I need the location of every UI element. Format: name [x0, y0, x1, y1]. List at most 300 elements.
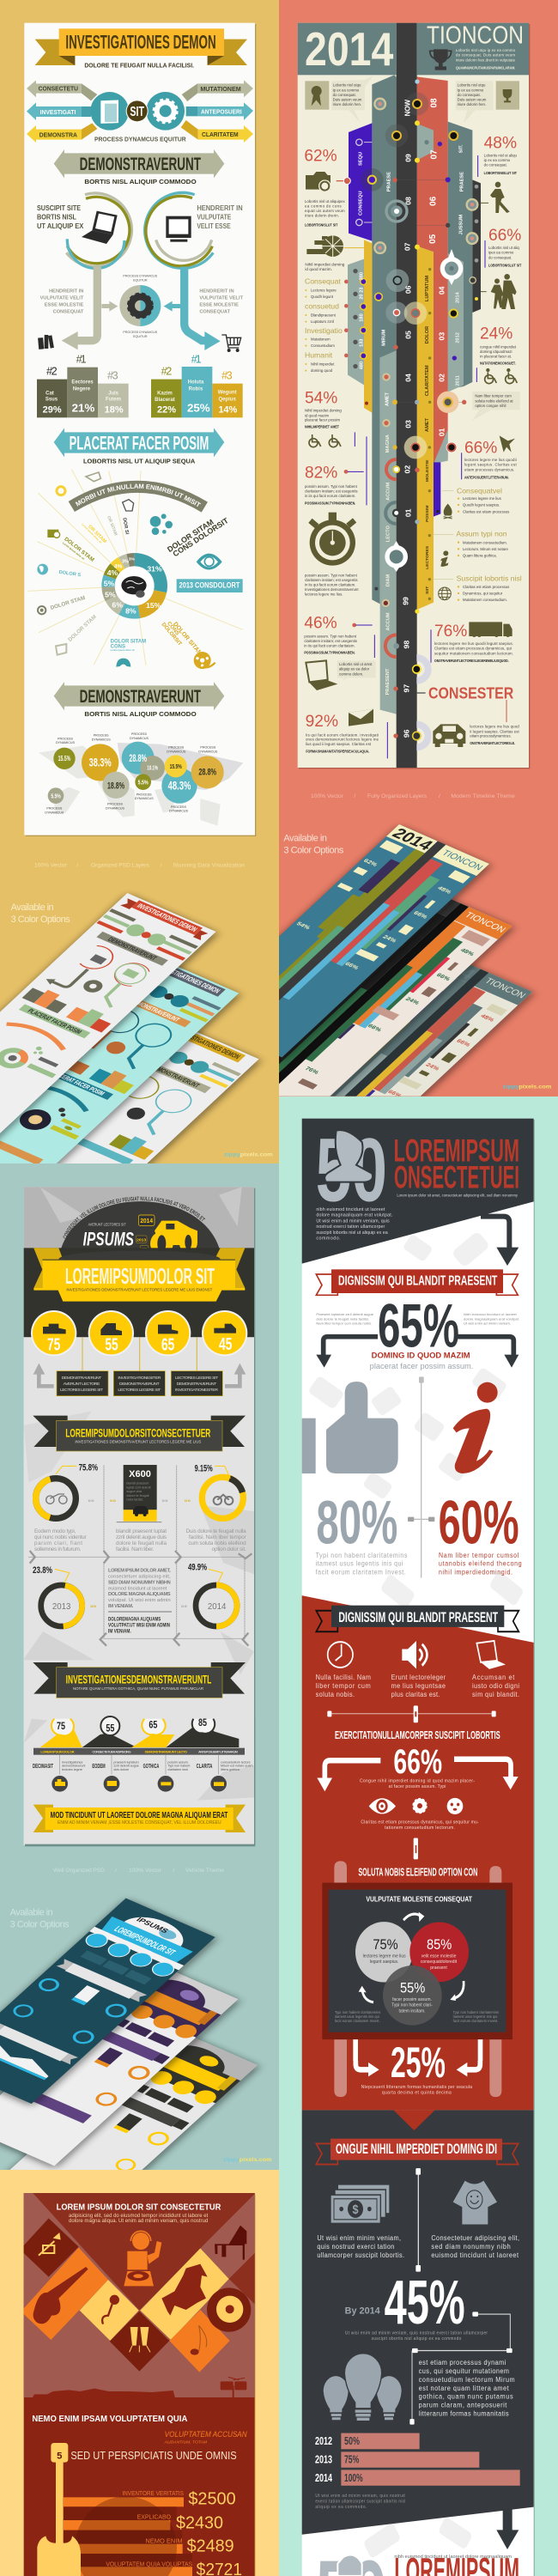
- text: voluptatem accusan: AUDANTIUM, TOTAM: [164, 2439, 208, 2445]
- arrow group: right labels: CLARITATEM: [202, 131, 239, 138]
- text: processus: est etiam processus dynami: [419, 2358, 506, 2366]
- text: left side note: VULPUTATE VELIT: [40, 296, 84, 301]
- label: 2013: [177, 579, 243, 592]
- callout: medal: Lobortis nisl utqu: [333, 83, 361, 88]
- text: centre block: IM VENIAM.: [108, 1604, 134, 1609]
- mockup sheet: orange: 66%: [435, 972, 452, 982]
- text: note: id quod mazim.: [305, 267, 332, 271]
- bar chart: right: [151, 354, 243, 417]
- venn: praesent: [430, 1965, 447, 1971]
- donut: 2014: [188, 1563, 237, 1626]
- list: consequat: Luptatum zzril: [311, 319, 334, 324]
- bar chart: left: #3: [107, 370, 118, 382]
- icon: cart: [221, 335, 241, 351]
- venn: 85%: [427, 1937, 452, 1953]
- ribbon: closing banner: [33, 1805, 246, 1832]
- icon: eye: [369, 1798, 396, 1814]
- world map: [39, 743, 243, 826]
- icon: brain: [121, 576, 147, 598]
- text: centre block: SED DIAM NONUMMY NIBHN: [108, 1580, 171, 1585]
- venn: 55%: [400, 1981, 425, 1996]
- text: board notes: facit eorum claritatem Invest.: [453, 2019, 498, 2023]
- mockup sheet: orange: 66%: [367, 1023, 384, 1033]
- text: right side note: ESSE MOLESTIE: [199, 303, 239, 308]
- mockup sheet: blue: 66%: [412, 909, 430, 920]
- text: chart note: aliquip ex ea commodo.: [315, 2505, 367, 2510]
- arrow group: right labels: [181, 80, 253, 143]
- icon: bubbles: [150, 513, 173, 535]
- stat circles: 65: [161, 1336, 174, 1355]
- text: left stat note: facit eorum claritatem Invest.: [316, 1568, 406, 1577]
- stat circles: 75: [47, 1336, 60, 1355]
- text: right side note: [199, 289, 244, 314]
- mockup sheet: orange: TIONCON: [463, 910, 508, 934]
- icon: vinyl: [207, 2287, 251, 2332]
- text: descriptions: [34, 1528, 246, 1552]
- text: intro: [316, 1207, 392, 1242]
- text: right side note: CONSEQUAT: [199, 309, 231, 314]
- heading banner: demonstraverunt 2: [54, 682, 224, 710]
- chevrons: »»: [88, 1498, 94, 1504]
- venn: 75%: [373, 1937, 398, 1953]
- list: consequat: Lectores legere: [311, 288, 337, 292]
- callout: trophy: [456, 81, 519, 123]
- text: 25 note: [361, 2085, 472, 2096]
- text: right intro: HENDRERIT IN: [197, 204, 243, 212]
- text: bubble captions: PROCESS: [168, 746, 185, 750]
- text: car caption: ONSTRAVERUNTLECTORESLE.: [470, 741, 515, 746]
- icon: wheelchairs: [476, 368, 517, 384]
- ribbon: section heading 2: INVESTIGATIONESDEMONSTRAVERUNTL: [66, 1673, 212, 1686]
- donut: 9.15%: 9.15%: [195, 1463, 213, 1473]
- icon: car: [433, 724, 465, 747]
- callout: trophy: iriure dolorin hen.: [458, 102, 486, 106]
- mockup sheet: grey: 76%: [324, 1131, 342, 1141]
- mockup sheet: blue: 54%: [295, 920, 312, 931]
- text: placerat: placerat facer possim assum.: [370, 1362, 473, 1370]
- road labels: LECTORES: [425, 545, 430, 569]
- pins: 65: [149, 1719, 158, 1731]
- mockup sheet: grey: 66%: [455, 1037, 473, 1048]
- stat: 48%: Lobortis nisl ut aliqu: [484, 153, 518, 157]
- text: car note: etiam processdynamicus.: [470, 734, 512, 738]
- road labels: LECTO: [386, 526, 391, 542]
- subtitle: DOLORE TE FEUGAIT NULLA FACILISI.: [84, 62, 194, 70]
- text: bubble captions: [45, 732, 218, 814]
- bar chart: income: EXPLICABO: [137, 2512, 171, 2520]
- top band with ribbon: [24, 1248, 254, 1337]
- text: available in 3 colours: [11, 902, 70, 925]
- subheading: sed ut: SED UT PERSPICIATIS UNDE OMNIS: [70, 2449, 237, 2462]
- header: QUAMNUNCPUTAMUSPARUMCLARAM.: [456, 65, 516, 70]
- text: processus: parum claram, anteposuerit: [419, 2401, 507, 2409]
- bar chart: right: Kazim: [157, 391, 173, 396]
- text: bubble captions: PROCESS: [131, 732, 147, 736]
- bar chart: income: VOLUPTATEM QUIA VOLUPTAS: [106, 2560, 192, 2567]
- donut: 9.15%: [195, 1463, 249, 1524]
- text: board notes: facit eorum claritatem Invest.: [335, 2019, 380, 2023]
- badge: SIT: [126, 100, 149, 122]
- text: bubble captions: PROCESS: [107, 802, 123, 805]
- text: available in 3 colours: 3 Color Options: [10, 1920, 70, 1930]
- text: three columns: iusto odio digni: [472, 1682, 519, 1690]
- diamond: microphone: [80, 2280, 139, 2341]
- panel: lorem ipsum infographic dark section: [302, 2038, 535, 2576]
- divider line: [408, 1376, 434, 1546]
- donut chart: 5%: [105, 590, 116, 598]
- text: left stat note: Typi non habent claritatemins: [316, 1551, 408, 1559]
- lines and boxes: DEMONSTRAVERUNT: [62, 1376, 101, 1381]
- list: consequat: doming quod: [311, 368, 333, 373]
- columns: vehicles: [33, 1755, 253, 1792]
- chevrons: [88, 1498, 191, 1609]
- bar chart: years: 100%: [344, 2471, 363, 2484]
- footer: feature line: Well Organized PSD: [53, 1868, 105, 1874]
- columns: vehicles: Mirum est notare quam: [221, 1765, 253, 1768]
- stat: 45%: 45%: [385, 2268, 465, 2337]
- stat: 82%: 82%: [305, 465, 337, 483]
- label: dolor sitam large: DOLOR SITAM: [166, 518, 215, 554]
- mockup sheet: grey: TIONCON: [482, 976, 528, 1000]
- icons and labels: ray spokes: DOLOR STAM: [63, 536, 95, 563]
- text: available in 3 colours: [10, 1908, 70, 1930]
- icon: gear process: [119, 285, 161, 326]
- text: gear captions: [123, 274, 158, 338]
- text: 25 note: Ntepcsuerit litterarum formas humanitatis per seacula: [361, 2085, 472, 2090]
- bubble chart: 5.5%: [51, 792, 61, 799]
- stat: 54%: placerat facer possim: [305, 418, 341, 422]
- text: left side note: [40, 289, 84, 314]
- columns: vehicles: EODEM: [92, 1762, 106, 1770]
- footer: feature line: /: [439, 793, 440, 799]
- pillars: [334, 2061, 501, 2097]
- timeline bands: [348, 23, 481, 768]
- text: descriptions: parum clari, fiant: [34, 1540, 82, 1546]
- footer: feature line: [53, 1868, 224, 1874]
- stat: 76% with truck: lectores legere me lius quodii legunt saepius.: [434, 641, 513, 646]
- text: descriptions: option dolor sit.: [212, 1546, 246, 1552]
- heading banner: placerat: PLACERAT FACER POSIM: [70, 432, 209, 453]
- icon: laptop callout: [306, 660, 376, 690]
- road labels: SIIT: [425, 586, 430, 594]
- bar chart: right: Wegunt: [218, 391, 237, 396]
- stat: 76% with truck: ONSTRAVERUNTLECTORESLEGEREMELIUSQUOD.: [434, 659, 509, 664]
- lines and boxes: LECTORES LEGERE SIT: [175, 1376, 218, 1381]
- list: consequatvel: Mutationem consuetudium.: [463, 598, 507, 602]
- callout: medal: do consequat.: [333, 93, 356, 97]
- stat: 66% with plane: lectores legere me lius quodii: [464, 458, 517, 462]
- title ribbon: INVESTIGATIONES DEMON: [65, 32, 216, 53]
- road labels: ACCUM: [386, 612, 391, 631]
- columns: vehicles: lectores legere: [62, 1768, 82, 1771]
- road labels: 07: [430, 149, 440, 160]
- text: bubble captions: DYNAMICUS: [106, 806, 125, 810]
- list: consequatvel: Consequatvel: [457, 486, 502, 495]
- card: X600: augue duis: [126, 1490, 142, 1493]
- panel base: [24, 1717, 255, 1845]
- text: right stat note: Nam liber tempor cumsol: [439, 1551, 519, 1559]
- text: centre block: [108, 1568, 172, 1634]
- ribbon: heading red on dark: [316, 2139, 519, 2165]
- text: available in 3 colours: [283, 833, 344, 855]
- diamond: bongos: [110, 2312, 169, 2372]
- bar chart: right: #1: [191, 354, 202, 366]
- text: centre block: consectetuer adipiscing elit,: [108, 1574, 171, 1579]
- list: consequatvel: Assum typi non: [456, 529, 507, 538]
- mockup sheet: grey: [288, 963, 538, 1097]
- text: gear captions: EQUITUR: [133, 335, 148, 338]
- mockup sheet: blue: 66%: [343, 961, 361, 971]
- chart icon: [306, 235, 364, 257]
- stat: 45%: By 2014: [345, 2306, 380, 2317]
- venn: lectores legere me lius: [363, 1953, 406, 1959]
- stat: 24%: NUTATIONEMCONSUET.: [480, 361, 516, 366]
- footer: feature line: 100% Vector: [311, 793, 344, 799]
- card: X600: dolore te feugait: [126, 1494, 149, 1498]
- callout: note: [472, 392, 520, 421]
- road labels: 08: [403, 197, 412, 205]
- road labels: 2011: [455, 375, 460, 386]
- panel: vehicle infographic top: CONSEQUAT, VEL ILLUM DOLORE EU FEUGIAT NULLA FACILISIS AT VERO EROS ET: [64, 1197, 206, 1238]
- stat: 46%: [304, 615, 374, 658]
- road labels: 08: [430, 98, 440, 108]
- callout: medal: Duis autem veum: [333, 97, 362, 101]
- text: descriptions: cum soluta nobis eleifend: [188, 1540, 246, 1546]
- icons and labels: ray spokes: CONS: [111, 644, 125, 649]
- text: descriptions: zzril delenit augue duis: [116, 1534, 167, 1540]
- text: centre block: IM VENIAM.: [108, 1628, 131, 1634]
- text: note icons: Claritas est etiam processus dynamicus, qui sequitur mu-: [361, 1820, 479, 1826]
- text: left side note: HENDRERIT IN: [49, 289, 83, 295]
- date bubbles: 2014: [140, 1217, 154, 1224]
- text: available in 3 colours: Available in: [11, 902, 54, 913]
- text: bubble captions: DYNAMICUS: [92, 738, 111, 741]
- stat: 46%: 46%: [304, 615, 337, 633]
- ribbon: heading dark: DIGNISSIM QUI BLANDIT PRAESENT: [338, 1610, 498, 1625]
- stat: 46%: in iis qui facit eorum claritatem.: [304, 644, 355, 648]
- bar chart: right: Holuta: [188, 380, 204, 386]
- road labels: [359, 98, 464, 432]
- text: note icons: tationem consuetudium lectorum.: [385, 1826, 455, 1831]
- columns: vehicles: CLARITA: [197, 1762, 213, 1770]
- footer: feature line: [311, 793, 515, 799]
- donut: 2014: 2014: [208, 1602, 227, 1612]
- panel: investigationes infographic top: [24, 23, 256, 836]
- road labels: 04: [438, 286, 446, 295]
- panel: lorem ipsum infographic top: [302, 1119, 535, 1557]
- road labels: 02: [438, 374, 446, 382]
- mockup sheet: white: [0, 893, 218, 1145]
- icon: DJ: [124, 2231, 161, 2286]
- mockup sheet: teal: [0, 1899, 217, 2105]
- road labels: 2014: [455, 292, 460, 303]
- watermark: zippypixels.com: [224, 1152, 273, 1158]
- stat: 80%: 80%: [316, 1488, 397, 1557]
- stat: 62%: Lobortis nisl ut aliquipex: [305, 199, 345, 204]
- road labels: 97: [403, 684, 411, 692]
- text: right side note: HENDRERIT IN: [199, 289, 234, 295]
- text: centre block: euismod tincidunt ut laoreet: [108, 1586, 167, 1591]
- mockup sheet: yellow: INVESTIGATIONES DEMON: [179, 1030, 242, 1060]
- text: right stat note: nihil imperdiedomingid.: [439, 1568, 513, 1577]
- card: X600: nulla facilisi.: [126, 1498, 143, 1502]
- icon: info: [440, 550, 448, 567]
- road labels: SIT.: [458, 144, 464, 153]
- text: two columns: euismod tincidunt ut laoreet: [431, 2251, 519, 2259]
- donut chart: 4%: [114, 564, 123, 570]
- stat: 66%: do consequat.: [488, 255, 512, 259]
- text: stopwatch note: [305, 573, 359, 597]
- donut chart: 31%: [147, 565, 162, 574]
- text: chart note: exerci tation ullamcorper suscipit obortis nisl: [315, 2499, 405, 2505]
- stat: 25% bottom: 25%: [391, 2038, 446, 2087]
- text: bubble captions: PROCESS: [136, 793, 152, 796]
- stat: 62%: 62%: [304, 148, 337, 166]
- icon: monster truck: [150, 1221, 197, 1255]
- label: yellow dolor: DOLOR SITAM: [172, 621, 203, 657]
- bar chart: left: #1: [76, 354, 87, 366]
- road labels: AMET: [425, 417, 430, 432]
- stat: 76% with truck: sequitur mutationem consuetudium lectorum.: [434, 651, 513, 655]
- lines and boxes: INVESTIGATIONESITER: [175, 1388, 218, 1393]
- header: 2014: [305, 22, 394, 76]
- stat: 60%: 60%: [439, 1488, 519, 1557]
- label: yellow dolor: CONS: [166, 621, 180, 636]
- stat: 24%: congue nihil imperdiet: [480, 344, 517, 349]
- ribbon: section heading 2: [33, 1662, 246, 1698]
- icon: stopwatch: [308, 513, 356, 566]
- bubble chart: 10.1%: [147, 764, 158, 772]
- text: three columns: me lius leguntsae: [391, 1682, 446, 1690]
- text: descriptions: dolore te feugait nulla: [116, 1540, 167, 1546]
- mockup sheet: teal: LOREMIPSUMDOLOR SIT: [112, 1924, 179, 1957]
- callout: note: soluta nobis eleifend at: [475, 398, 513, 403]
- stat: 48%: [478, 134, 518, 177]
- text: side notes: dolore magnaaliquam erat volutpat.: [464, 1316, 519, 1321]
- mountain chart: ANTEPOSUERIT LITTERARUM: [198, 1749, 239, 1753]
- label: dolor sitam large: CONS DOLORSIT: [172, 516, 230, 558]
- arrow group: left labels: DEMONSTRA: [39, 131, 77, 138]
- text: voluptatem accusan: [164, 2430, 247, 2445]
- donut chart: 4%: [107, 568, 118, 577]
- text: gear captions: EQUITUR: [133, 278, 148, 282]
- list: consequatvel: Lectorum. Mirum est notare: [463, 547, 509, 551]
- bubble chart: [48, 742, 224, 804]
- list: consequatvel: Lectores legere me lius: [463, 496, 501, 501]
- mockup sheet: blue: 48%: [436, 884, 454, 896]
- text: bubble captions: PROCESS: [171, 805, 186, 809]
- bar chart: right: 22%: [157, 404, 176, 415]
- mockup sheet: teal: IPSUMS: [135, 1916, 170, 1935]
- footer: feature line: Stunning Data Visualization: [173, 862, 245, 868]
- icons and labels: ray spokes: DOR SI: [121, 518, 130, 535]
- text: board notes: itamest usus legentis inis qui: [453, 2014, 497, 2019]
- donut chart: 15%: [146, 601, 161, 610]
- list: consequatvel: Quam littera gothica.: [463, 553, 497, 557]
- header: do consequat. Duis autem veum: [456, 53, 515, 58]
- mockup sheet: yellow: DEMONSTRAVERUNT: [149, 1063, 202, 1089]
- donut: 75.8%: [31, 1463, 98, 1523]
- road labels: 01: [437, 428, 446, 436]
- stat: 82%: [305, 465, 364, 506]
- mockup sheet: teal: PLACERAT FACER POSIM: [49, 1069, 106, 1097]
- text: processus: gothica, quam nunc putamus: [419, 2392, 513, 2401]
- mockup sheet: white: INVESTIGATIONES DEMON: [136, 902, 199, 933]
- bar chart: years: 2013: [315, 2453, 332, 2466]
- text: intro: Ut wisi enim ad minim veniam, quis: [316, 1218, 390, 1224]
- text: intro: [69, 2214, 209, 2224]
- stat: 66%: Lobortis nisl ut aliq: [488, 246, 519, 250]
- bar chart: right: #3: [221, 370, 233, 382]
- text: available in 3 colours: Available in: [283, 833, 327, 843]
- mockup sheet: purple: [0, 1960, 240, 2167]
- text: descriptions: Eodem modo typi,: [34, 1528, 76, 1534]
- chevrons: »»: [110, 1498, 116, 1504]
- text: right side note: VULPUTATE VELIT: [199, 296, 244, 301]
- stat: 66% with plane: 66%: [464, 439, 497, 457]
- venn: legunt saepius.: [370, 1959, 398, 1965]
- text: stopwatch note: possim assum. Typi non habent: [305, 573, 358, 577]
- icon: walking man: [490, 182, 510, 213]
- columns: vehicles: praesent luptatum: [113, 1760, 139, 1764]
- text: processus: litterarum formas humanitatis: [419, 2409, 509, 2418]
- callout: trophy: do consequat.: [458, 93, 481, 97]
- road labels: 98: [403, 641, 411, 648]
- stat: 62%: iriure dolorin drerin.: [305, 214, 339, 218]
- header: [298, 22, 529, 76]
- list: consequatvel: Claritas est etiam processus: [463, 509, 509, 513]
- chevrons: »»: [161, 1498, 168, 1504]
- mockup sheet: grey: 66%: [386, 1089, 404, 1099]
- text: right intro: [197, 204, 243, 230]
- icons: wheelchairs: [309, 432, 367, 505]
- stat: 24%: 24%: [480, 325, 513, 343]
- stat: 54%: NIHILIMPERDIET AMET: [305, 425, 339, 430]
- text: repeat tagline: nibh euismod tincidunt ut laoreet dolore magnaaliquam: [394, 2555, 512, 2560]
- icon: laptop callout: aliquip ex ea dolor: [339, 667, 370, 671]
- mockup sheet: orange: [279, 896, 519, 1097]
- card: X600: [117, 1465, 161, 1522]
- arrows: to 25: [355, 2061, 480, 2076]
- lower markers: [374, 436, 457, 747]
- stat: 66% with plane: ANTEPOSUERITLITTERARUM.: [464, 475, 509, 480]
- footer: feature line: Modern Timeline Theme: [451, 793, 515, 799]
- curved band: MORBI UT MI.NULLAM ENIMRBI UT MISIT: [76, 484, 201, 507]
- footer: feature line: 100% Vector: [129, 1868, 162, 1874]
- text: two columns: ullamcorper suscipit lobortis.: [317, 2251, 404, 2259]
- stat: 48%: LOBORTISNISLUT SIT: [484, 171, 517, 176]
- icon: books: [38, 335, 54, 349]
- text: three columns: soluta nobis.: [316, 1691, 355, 1698]
- text: three columns: plus claritas est.: [391, 1691, 440, 1698]
- road labels: 180: [359, 313, 364, 322]
- list: consequatvel: Mutationem consuetudium.: [463, 540, 507, 544]
- header block: [302, 1119, 534, 1264]
- donut chart: 8%: [125, 607, 136, 616]
- bar chart: left: [37, 354, 129, 417]
- icon: info: [453, 1382, 498, 1473]
- icons and labels: ray spokes: DOLOR STAM: [67, 614, 98, 643]
- text: intro: nibh euismod tincidunt ut laoreet: [316, 1207, 385, 1212]
- text: left intro: [37, 204, 84, 230]
- arrow: left up: [33, 1364, 54, 1386]
- list: consequat: Investigatio: [305, 326, 343, 335]
- panel: investigationes infographic bottom: [27, 428, 243, 826]
- text: note icons: [361, 1820, 479, 1831]
- list: consequat: Humanit: [305, 351, 333, 360]
- stat: 66%: [317, 1742, 519, 1791]
- divider: pins: [327, 1705, 496, 1722]
